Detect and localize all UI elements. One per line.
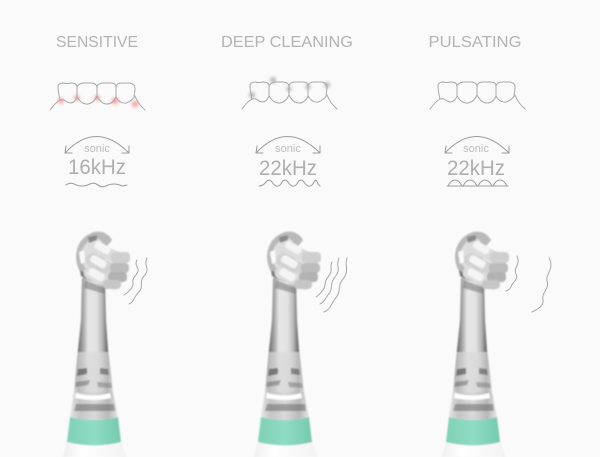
label: sonic: sonic bbox=[275, 143, 301, 155]
toothbrush head with vibration lines bbox=[442, 232, 551, 457]
heading: pulsating: PULSATING bbox=[428, 34, 522, 51]
heading: sensitive: SENSITIVE bbox=[56, 34, 138, 51]
label: 16kHz: 16kHz bbox=[68, 156, 126, 179]
icon: pulsed wave bbox=[447, 180, 508, 186]
icon: teeth with plaque spots bbox=[242, 77, 337, 109]
label: sonic: sonic bbox=[463, 143, 489, 155]
panel: deep cleaning mode bbox=[221, 34, 353, 457]
icon: teeth with red sensitive gums bbox=[50, 83, 145, 110]
icon: sonic arc arrows bbox=[445, 136, 509, 153]
label: 22kHz: 22kHz bbox=[259, 157, 317, 180]
label: 22kHz: 22kHz bbox=[447, 157, 505, 180]
panel: pulsating mode bbox=[428, 34, 551, 457]
icon: clean teeth bbox=[430, 82, 525, 109]
label: sonic: sonic bbox=[84, 143, 110, 155]
toothbrush head with vibration lines bbox=[63, 232, 147, 457]
heading: deep cleaning: DEEP CLEANING bbox=[221, 34, 353, 51]
icon: sonic arc arrows bbox=[65, 136, 129, 153]
icon: sonic arc arrows bbox=[256, 136, 320, 153]
icon: wave with peaks bbox=[259, 180, 320, 186]
toothbrush head with vibration lines bbox=[254, 232, 347, 457]
panel: sensitive mode bbox=[50, 34, 147, 457]
icon: gentle sound wave bbox=[66, 183, 127, 187]
